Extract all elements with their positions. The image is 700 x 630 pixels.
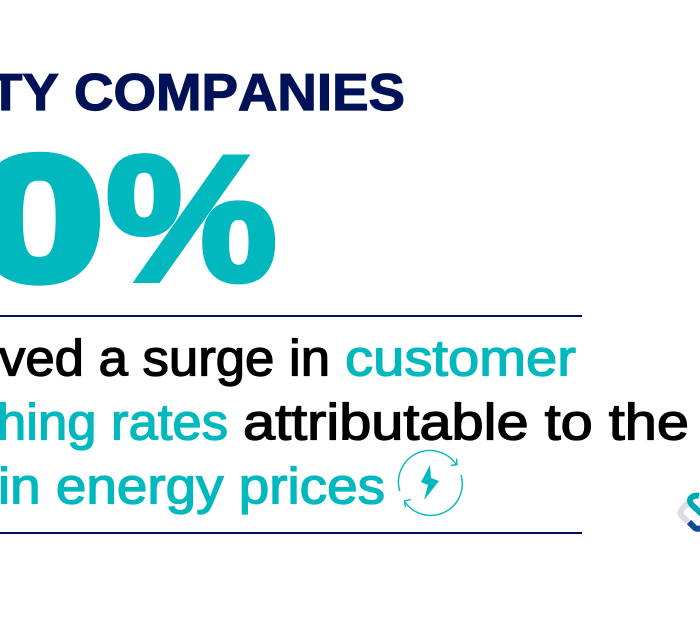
big statistic: [0, 119, 277, 318]
big statistic: %: [106, 119, 277, 318]
logo mark: [680, 496, 700, 529]
statement text: attributable to the: [243, 394, 689, 450]
heading: TY COMPANIES: [0, 64, 405, 122]
statement text: in energy prices: [0, 458, 385, 514]
top divider: [0, 315, 582, 317]
statement text: [0, 330, 689, 514]
statement text: ved a surge in: [0, 330, 330, 386]
statement text: hing rates: [0, 394, 228, 450]
bottom divider: [0, 532, 582, 534]
icon: lightning bolt with refresh arrows: [398, 451, 462, 515]
statement text: customer: [345, 330, 576, 386]
